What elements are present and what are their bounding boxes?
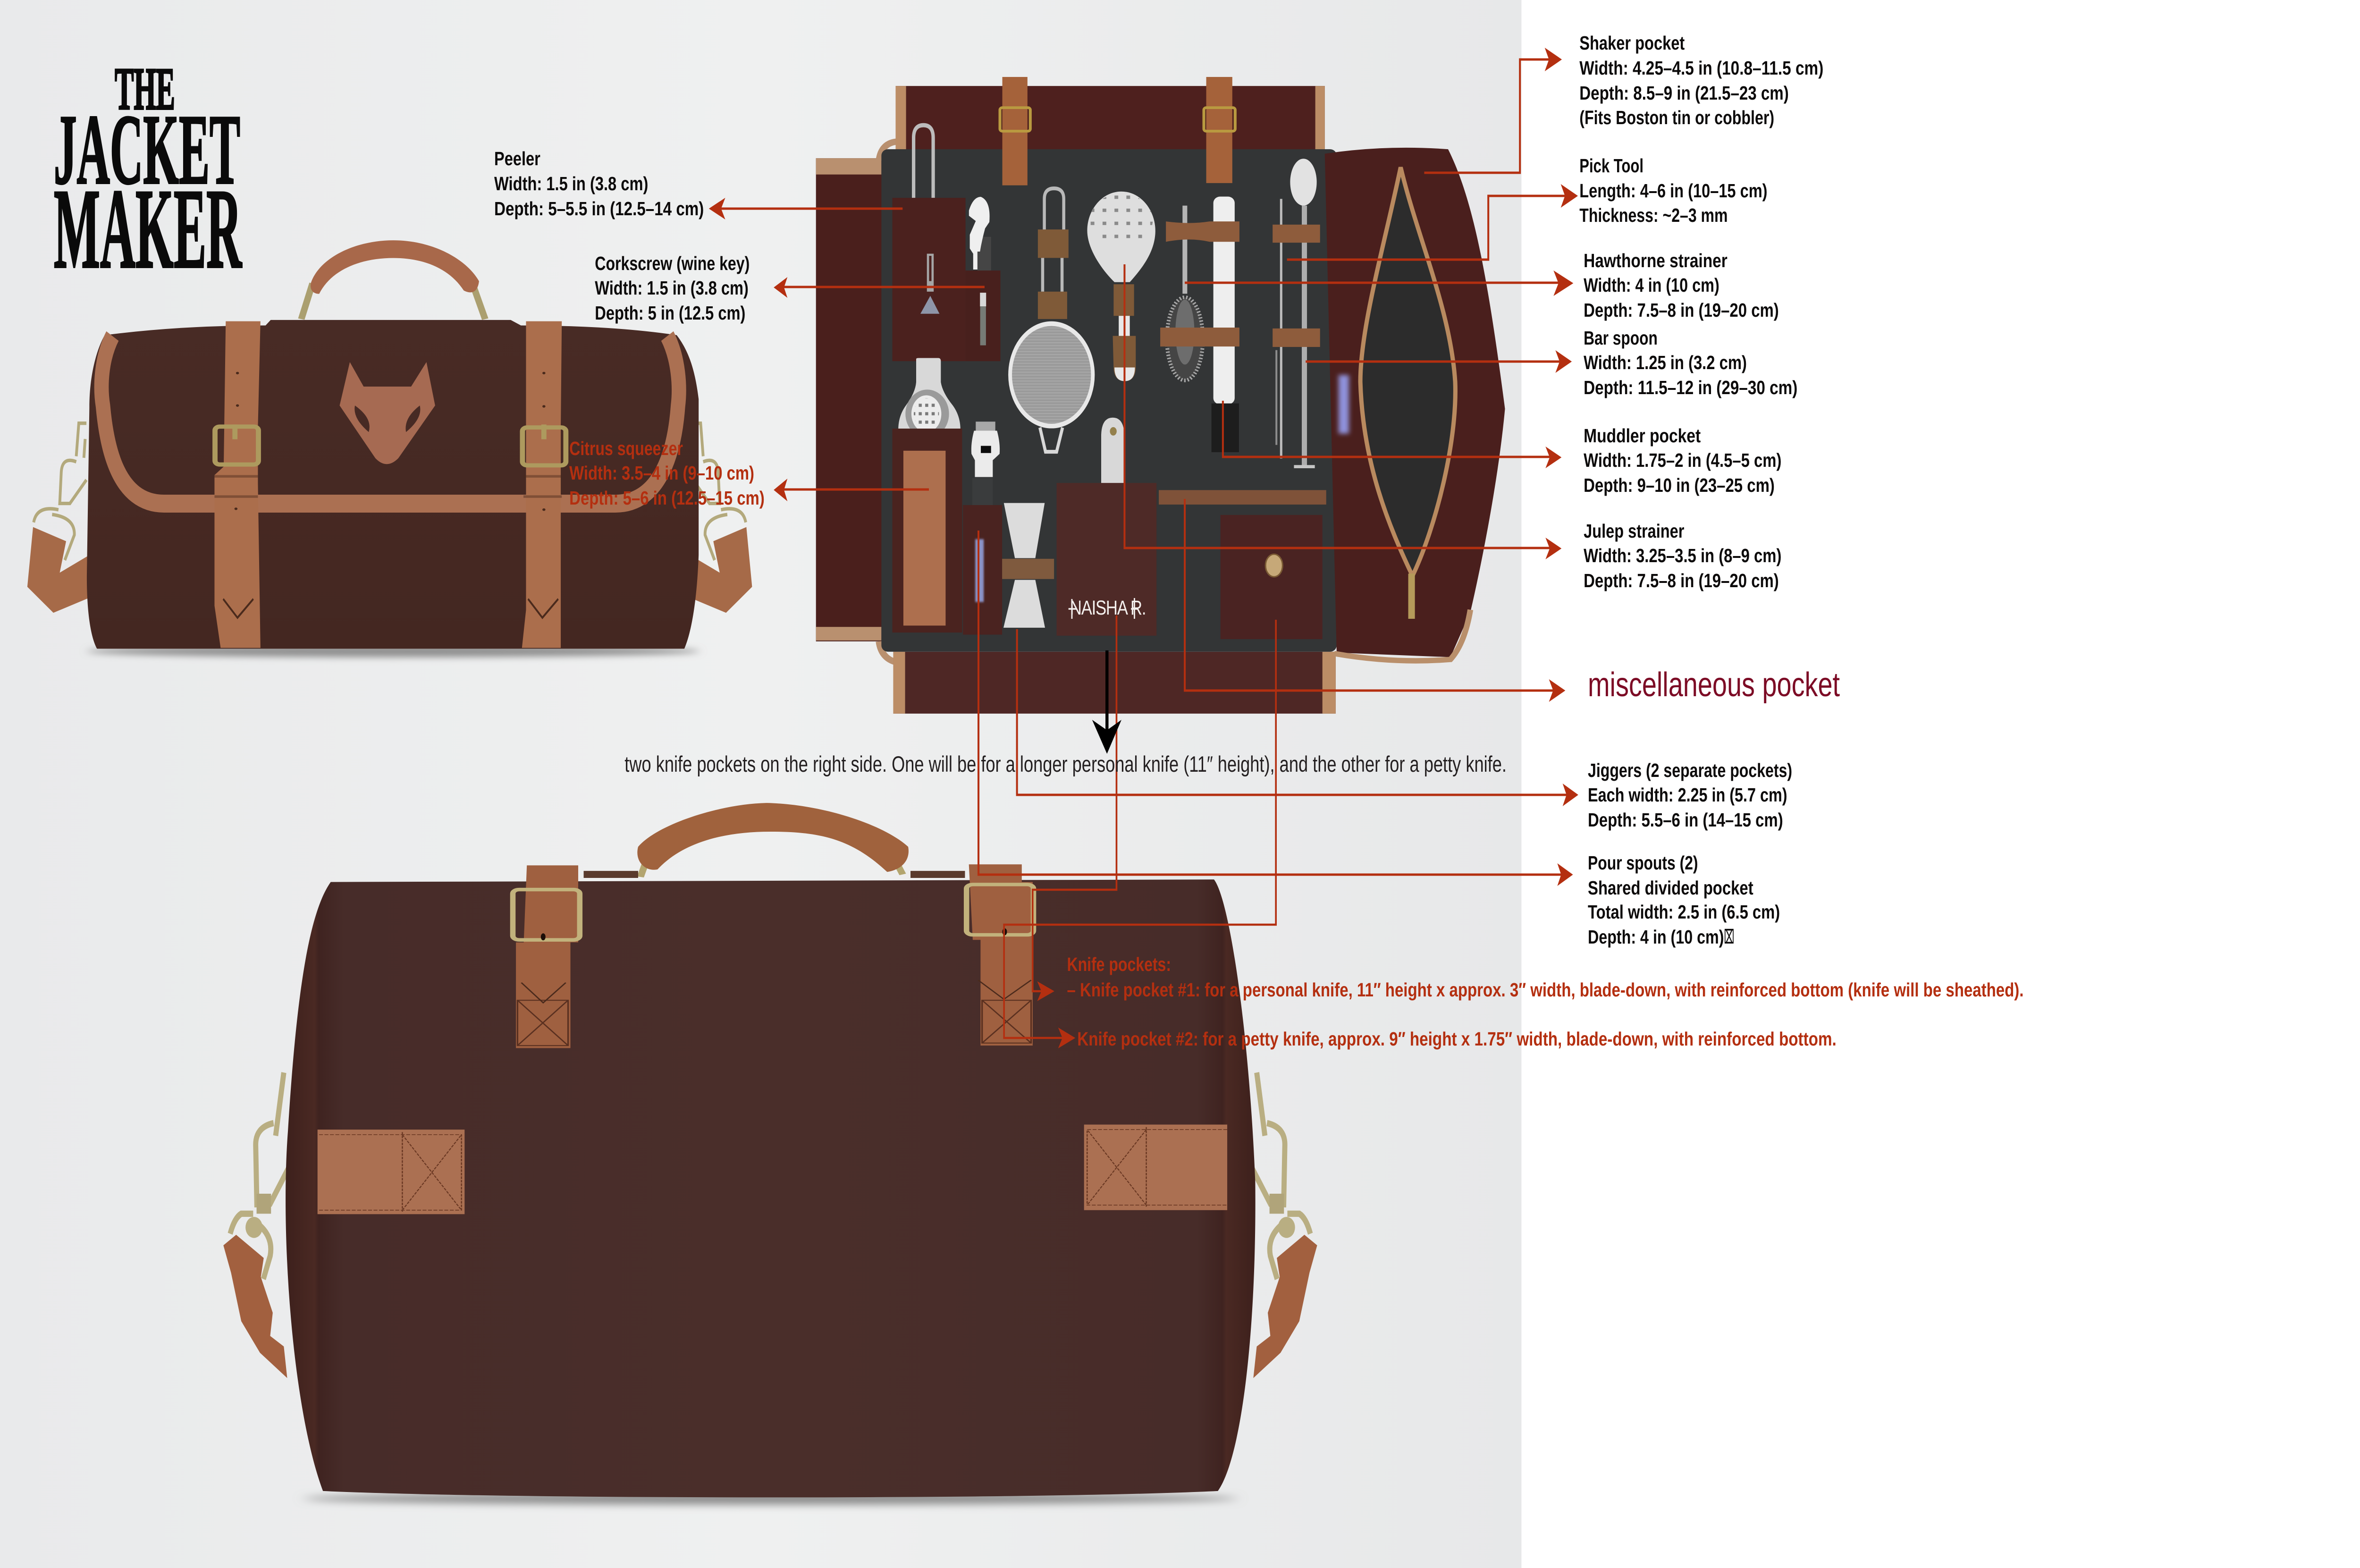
label: muddler pocket: Muddler pocket <box>1584 425 1701 447</box>
right side patch <box>1084 1125 1227 1210</box>
label: citrus squeezer <box>569 438 765 509</box>
citrus squeezer pocket <box>893 358 962 632</box>
logo: The Jacket Maker: JACKET <box>54 94 240 205</box>
label: bar spoon: Bar spoon <box>1584 327 1658 349</box>
top flap <box>895 86 1325 152</box>
label: pour spouts: Total width: 2.5 in (6.5 cm) <box>1588 901 1780 923</box>
flap piping <box>101 336 679 504</box>
note: two knife pockets: two knife pockets on the right side. One will be for a longer personal knife (11″ height), and the other for a petty knife. <box>624 752 1507 777</box>
leader arrow: knife pocket 1 <box>1033 615 1116 1001</box>
julep strainer <box>1087 192 1155 381</box>
right side strap and clasp <box>1252 1072 1317 1378</box>
label: citrus squeezer: Citrus squeezer <box>569 438 683 459</box>
back bag <box>223 803 1317 1505</box>
left side patch <box>318 1130 464 1214</box>
leader arrow: citrus squeezer <box>774 479 929 501</box>
front bag: rolled up with fox logo <box>27 240 752 657</box>
label: julep strainer <box>1584 520 1781 591</box>
label: pick tool: Pick Tool <box>1579 155 1644 177</box>
label: jiggers: Jiggers (2 separate pockets) <box>1588 759 1792 781</box>
label: julep strainer: Width: 3.25–3.5 in (8–9 cm) <box>1584 545 1781 566</box>
leader arrow: pour spouts <box>978 531 1573 886</box>
label: muddler pocket <box>1584 425 1781 496</box>
leader arrow: shaker pocket <box>1424 48 1562 173</box>
label: corkscrew <box>595 253 750 324</box>
label: shaker pocket: Shaker pocket <box>1579 32 1685 54</box>
hawthorne strainer <box>1167 206 1203 380</box>
left belt <box>214 321 261 648</box>
leader arrow: jiggers <box>1017 629 1578 806</box>
muddler <box>1212 197 1239 452</box>
label: pour spouts: Shared divided pocket <box>1588 877 1753 899</box>
label: pick tool <box>1579 155 1768 226</box>
belt stitching and holes <box>214 372 562 619</box>
right belt <box>522 321 562 648</box>
buckles <box>215 424 566 465</box>
top handle <box>584 803 965 877</box>
leader arrow: miscellaneous pocket <box>1185 499 1565 702</box>
handle <box>301 240 485 319</box>
label: julep strainer: Julep strainer <box>1584 520 1684 542</box>
label: jiggers: Depth: 5.5–6 in (14–15 cm) <box>1588 809 1783 831</box>
pour spouts pocket <box>963 422 1002 635</box>
left flap <box>816 142 898 663</box>
label: peeler: Peeler <box>494 148 540 169</box>
label: shaker pocket: Depth: 8.5–9 in (21.5–23 cm) <box>1579 82 1789 104</box>
label: hawthorne strainer: Hawthorne strainer <box>1584 250 1728 271</box>
label: corkscrew: Corkscrew (wine key) <box>595 253 750 274</box>
fine mesh strainer <box>1010 188 1093 452</box>
label: citrus squeezer: Width: 3.5–4 in (9–10 cm) <box>569 462 754 484</box>
label: pour spouts <box>1588 852 1780 948</box>
right shoulder strap and clasp <box>683 423 752 613</box>
leader arrow: julep strainer <box>1124 264 1561 559</box>
label: corkscrew: Depth: 5 in (12.5 cm) <box>595 302 745 324</box>
note: knife pockets: Knife pocket #2: for a petty knife, approx. 9″ height x 1.75″ width, blade-down, with reinforced bottom. <box>1077 1028 1837 1050</box>
label: bar spoon: Width: 1.25 in (3.2 cm) <box>1584 352 1747 373</box>
leader arrow: hawthorne strainer <box>1185 270 1573 296</box>
label: bar spoon: Depth: 11.5–12 in (29–30 cm) <box>1584 377 1797 398</box>
label: pour spouts: Depth: 4 in (10 cm) <box>1588 926 1724 948</box>
label: jiggers: Each width: 2.25 in (5.7 cm) <box>1588 784 1787 806</box>
left shoulder strap and clasp <box>27 423 97 613</box>
note: knife pockets: – Knife pocket #1: for a personal knife, 11″ height x approx. 3″ width, blade-down, with reinforced bottom (knife will be sheathed). <box>1067 979 2023 1001</box>
leader arrow: peeler <box>709 198 902 219</box>
tool retaining bands <box>1160 221 1320 347</box>
leader arrow: pick tool <box>1287 184 1578 260</box>
back straps with buckles <box>513 864 1034 1048</box>
top straps with buckles <box>1000 77 1235 185</box>
label: pick tool: Thickness: ~2–3 mm <box>1579 204 1728 226</box>
label: shaker pocket <box>1579 32 1823 128</box>
knife pockets <box>1057 418 1156 636</box>
label: peeler: Depth: 5–5.5 in (12.5–14 cm) <box>494 198 704 219</box>
leader arrow: corkscrew <box>774 277 985 298</box>
signature on knife pocket: NAISHA R. <box>1070 597 1146 619</box>
logo: The Jacket Maker <box>54 56 242 292</box>
label: bar spoon <box>1584 327 1797 398</box>
fox logo <box>340 362 435 464</box>
bag body <box>87 320 699 649</box>
label: hawthorne strainer: Depth: 7.5–8 in (19–20 cm) <box>1584 299 1779 321</box>
label: julep strainer: Depth: 7.5–8 in (19–20 cm) <box>1584 570 1779 591</box>
label: hawthorne strainer <box>1584 250 1779 321</box>
label: pick tool: Length: 4–6 in (10–15 cm) <box>1579 180 1768 202</box>
bar spoon and pick tool <box>1276 159 1317 467</box>
note: knife pockets: Knife pockets: <box>1067 953 1171 975</box>
miscellaneous pocket <box>1159 490 1326 639</box>
label: peeler <box>494 148 704 219</box>
label: muddler pocket: Width: 1.75–2 in (4.5–5 cm) <box>1584 449 1781 471</box>
open tool roll <box>816 77 1505 714</box>
left side strap and clasp <box>223 1072 289 1378</box>
zip pouch <box>1325 148 1505 661</box>
black arrow <box>1092 650 1121 754</box>
leader arrow: bar spoon <box>1306 350 1572 373</box>
jigger <box>1002 503 1054 628</box>
bottom flap <box>893 652 1336 714</box>
label: corkscrew: Width: 1.5 in (3.8 cm) <box>595 277 749 299</box>
peeler pocket with peeler <box>893 125 966 361</box>
label: shaker pocket: (Fits Boston tin or cobbler) <box>1579 107 1774 128</box>
charcoal interior <box>881 149 1337 652</box>
note: knife pockets <box>1067 953 2023 1050</box>
logo: The Jacket Maker: MAKER <box>54 165 242 292</box>
bag body <box>286 879 1256 1497</box>
label: peeler: Width: 1.5 in (3.8 cm) <box>494 173 648 194</box>
label: shaker pocket: Width: 4.25–4.5 in (10.8–11.5 cm) <box>1579 57 1823 79</box>
corkscrew in small pocket <box>966 197 1001 361</box>
label: muddler pocket: Depth: 9–10 in (23–25 cm) <box>1584 474 1775 496</box>
leader arrow: muddler pocket <box>1223 401 1561 468</box>
label: citrus squeezer: Depth: 5–6 in (12.5–15 cm) <box>569 487 765 509</box>
label: miscellaneous pocket: miscellaneous pocket <box>1588 666 1840 703</box>
label: pour spouts: ⌧ <box>1724 926 1734 948</box>
label: hawthorne strainer: Width: 4 in (10 cm) <box>1584 274 1719 296</box>
label: pour spouts: Pour spouts (2) <box>1588 852 1698 874</box>
background panel <box>0 0 1521 1568</box>
leader arrow: knife pocket 2 <box>1004 620 1276 1048</box>
label: jiggers <box>1588 759 1792 831</box>
logo: The Jacket Maker: THE <box>115 56 175 122</box>
